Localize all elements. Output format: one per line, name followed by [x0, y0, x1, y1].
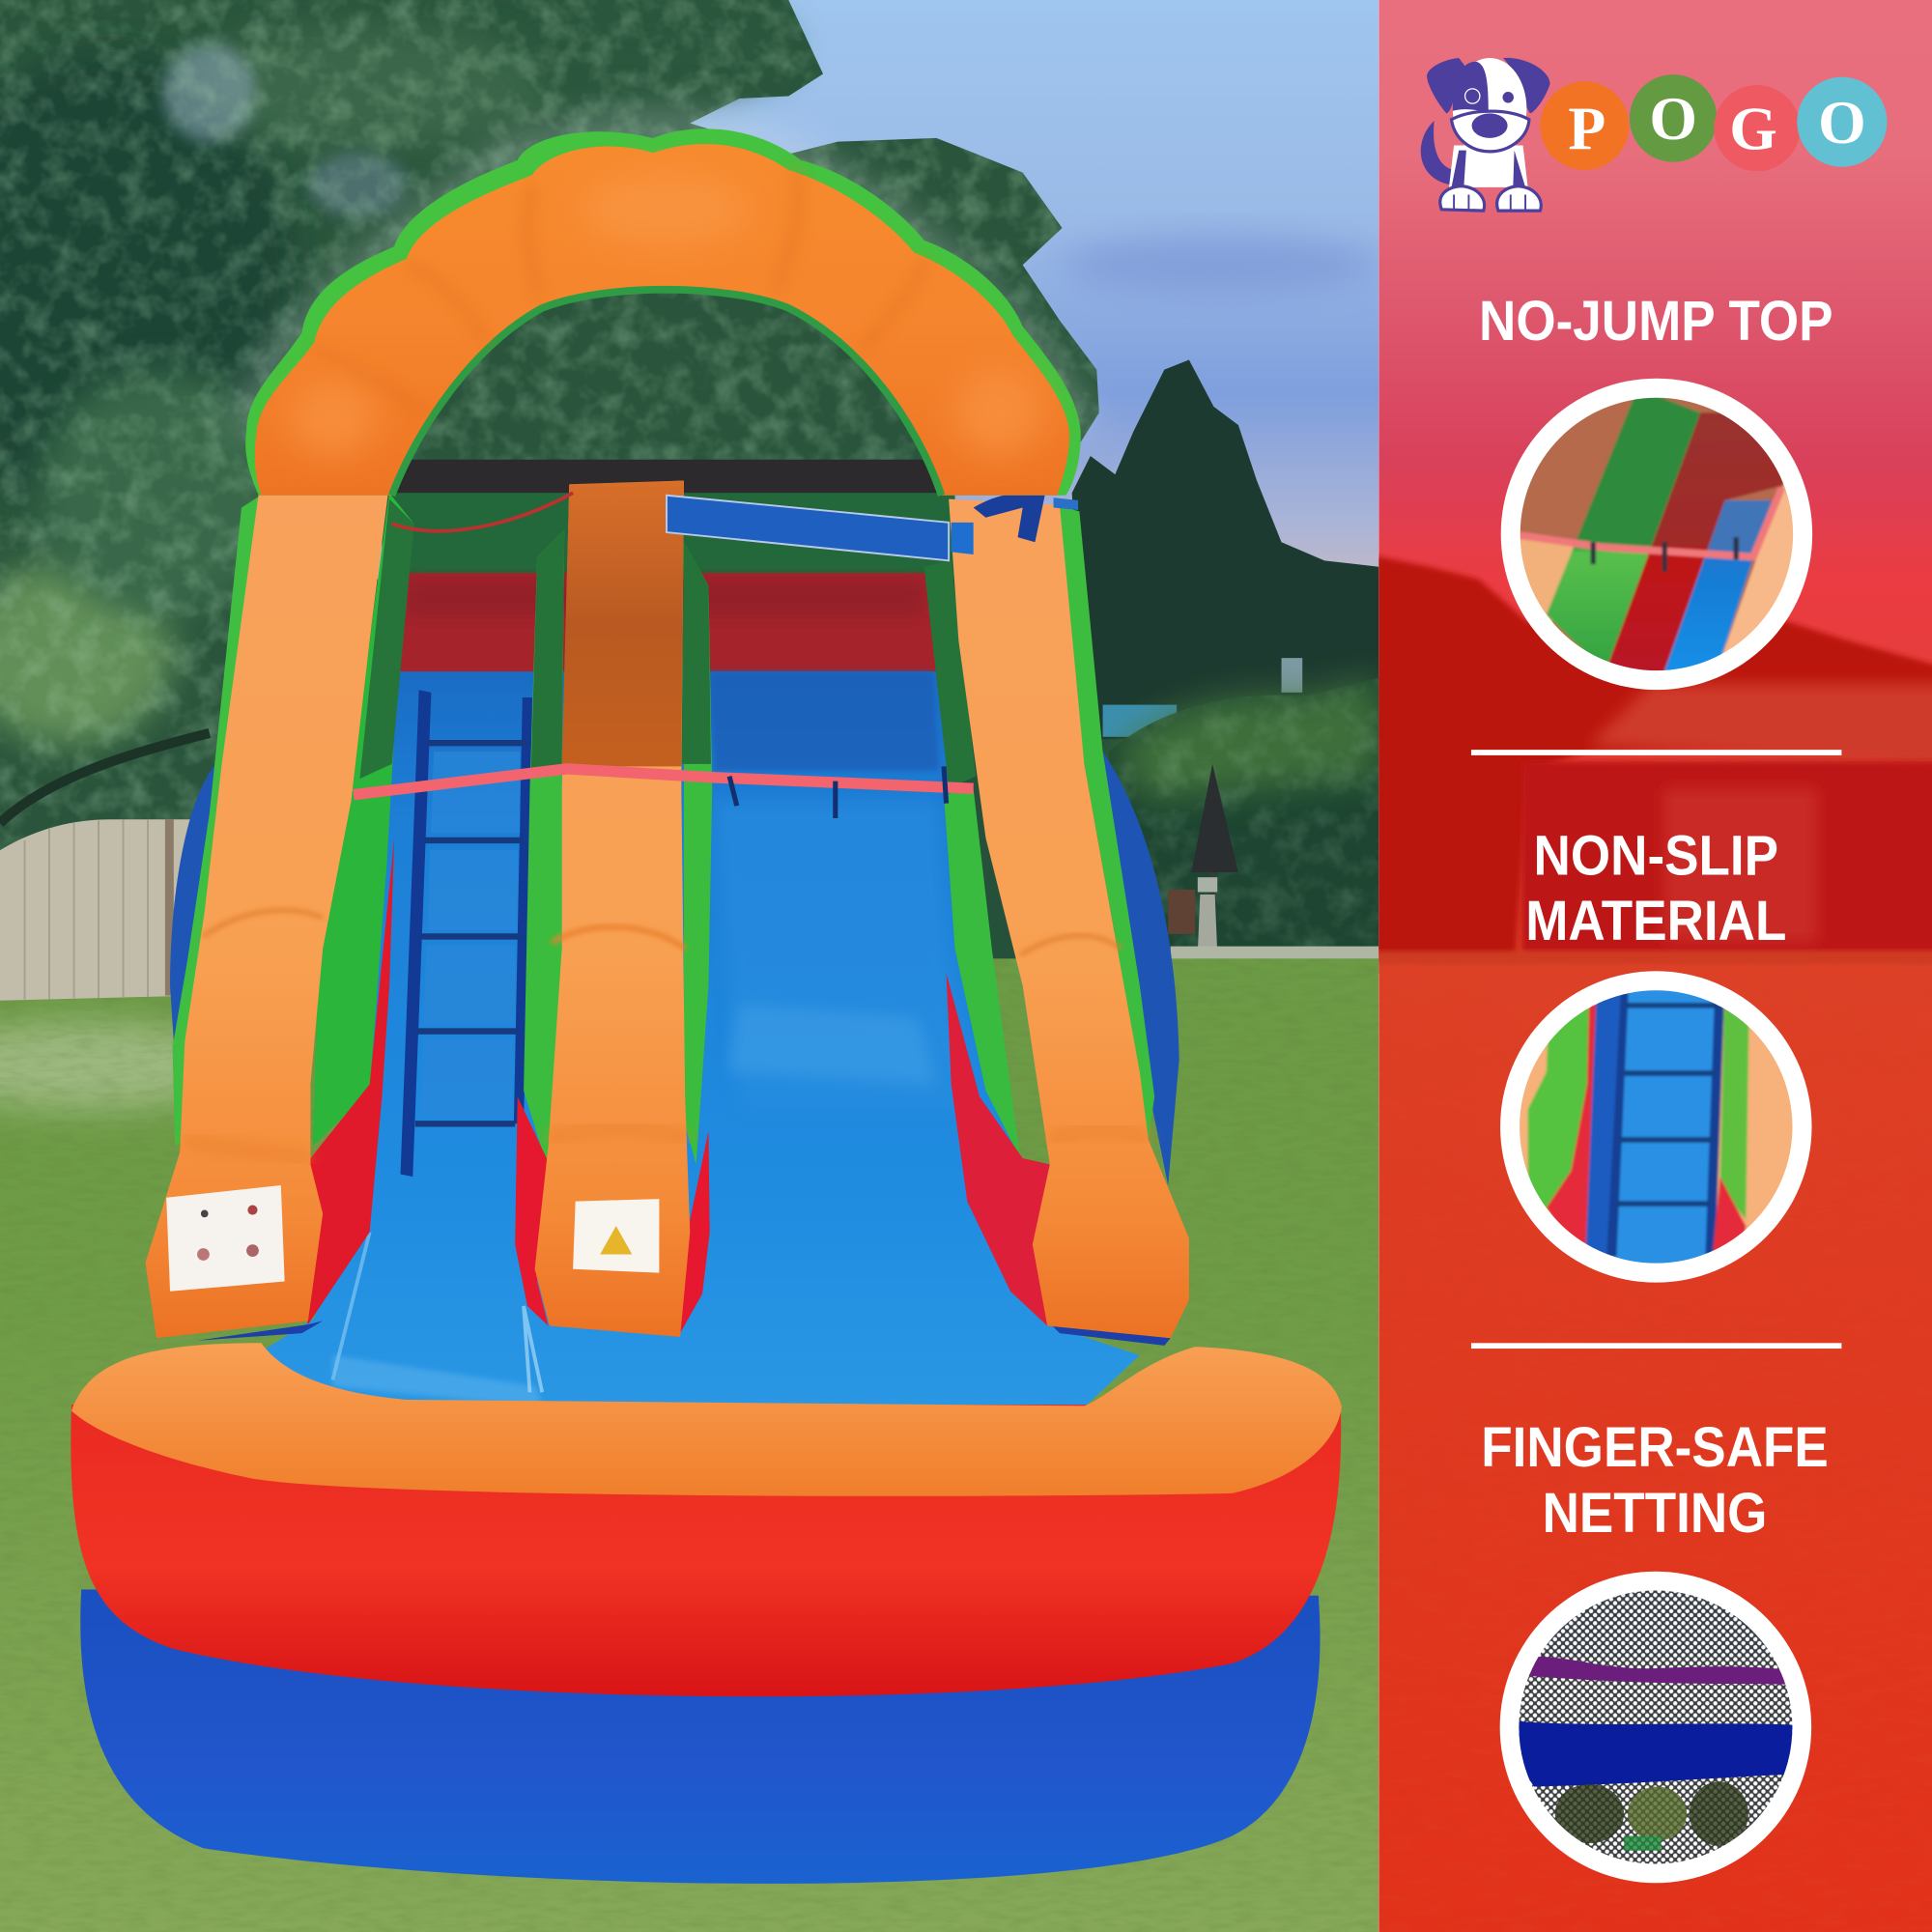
divider — [1471, 750, 1841, 755]
safety label — [166, 1185, 285, 1292]
arch — [245, 128, 1081, 496]
letter O: O — [1818, 88, 1866, 156]
lawn — [0, 958, 1378, 1932]
letter O — [1797, 77, 1887, 167]
trees seen through net — [1555, 1781, 1748, 1851]
inflatable water slide — [71, 128, 1342, 1884]
distant conifer forest — [1072, 359, 1378, 739]
background photo: backyard scene — [0, 0, 1380, 1932]
ladder — [401, 690, 532, 1177]
wooden fence — [0, 819, 197, 1001]
hedge — [1109, 678, 1378, 949]
heading: finger-safe netting: NETTING — [1543, 1482, 1767, 1545]
heading: non-slip material: MATERIAL — [1525, 890, 1786, 952]
grass texture — [1378, 963, 1932, 1932]
splash pool — [71, 1343, 1342, 1884]
path beside lawn — [1171, 947, 1378, 958]
heading: non-slip material: NON-SLIP — [1534, 824, 1778, 887]
upper tie rope — [392, 493, 573, 531]
circle: non-slip material detail — [1500, 971, 1812, 1283]
sky — [377, 0, 1379, 580]
pink rope — [354, 766, 974, 818]
cloud band — [1060, 236, 1380, 295]
patio umbrella and table — [1168, 764, 1238, 956]
pool blue base — [80, 1589, 1321, 1884]
left column — [146, 493, 414, 1341]
letter O: O — [1649, 84, 1697, 153]
forest silhouette — [1355, 552, 1932, 955]
slide surface — [265, 671, 1140, 1407]
letter G: G — [1729, 94, 1777, 162]
heading: non-slip material — [1525, 824, 1786, 952]
right feature panel — [1355, 0, 1932, 1932]
house silhouette — [1355, 684, 1932, 963]
paws — [1440, 186, 1485, 211]
background foliage base — [367, 580, 1379, 974]
soft halo around slide — [246, 127, 1081, 431]
warning label — [573, 1199, 659, 1273]
blue pool cover behind hedge — [1103, 705, 1177, 737]
side bulges — [170, 764, 228, 1060]
letter O — [1630, 74, 1717, 162]
letter P — [1540, 81, 1629, 170]
pool orange rim — [71, 1343, 1342, 1496]
letter P: P — [1568, 94, 1605, 162]
panel background — [1378, 0, 1932, 1932]
back wall — [382, 460, 955, 674]
POGO logo — [1421, 58, 1887, 211]
divider — [1471, 1343, 1841, 1349]
middle column — [515, 480, 712, 1337]
letter G — [1714, 85, 1801, 171]
circle: finger-safe netting detail — [1500, 1572, 1811, 1883]
dog mascot — [1421, 58, 1550, 211]
blue strap at top — [667, 493, 1078, 560]
right column — [924, 499, 1189, 1346]
circle: no-jump top detail — [1501, 379, 1812, 690]
heading: finger-safe netting: FINGER-SAFE — [1481, 1416, 1829, 1478]
heading: no-jump top: NO-JUMP TOP — [1479, 290, 1833, 353]
big tree on the left — [0, 0, 1099, 863]
pool red ring — [71, 1405, 1341, 1696]
heading: finger-safe netting — [1481, 1416, 1829, 1545]
